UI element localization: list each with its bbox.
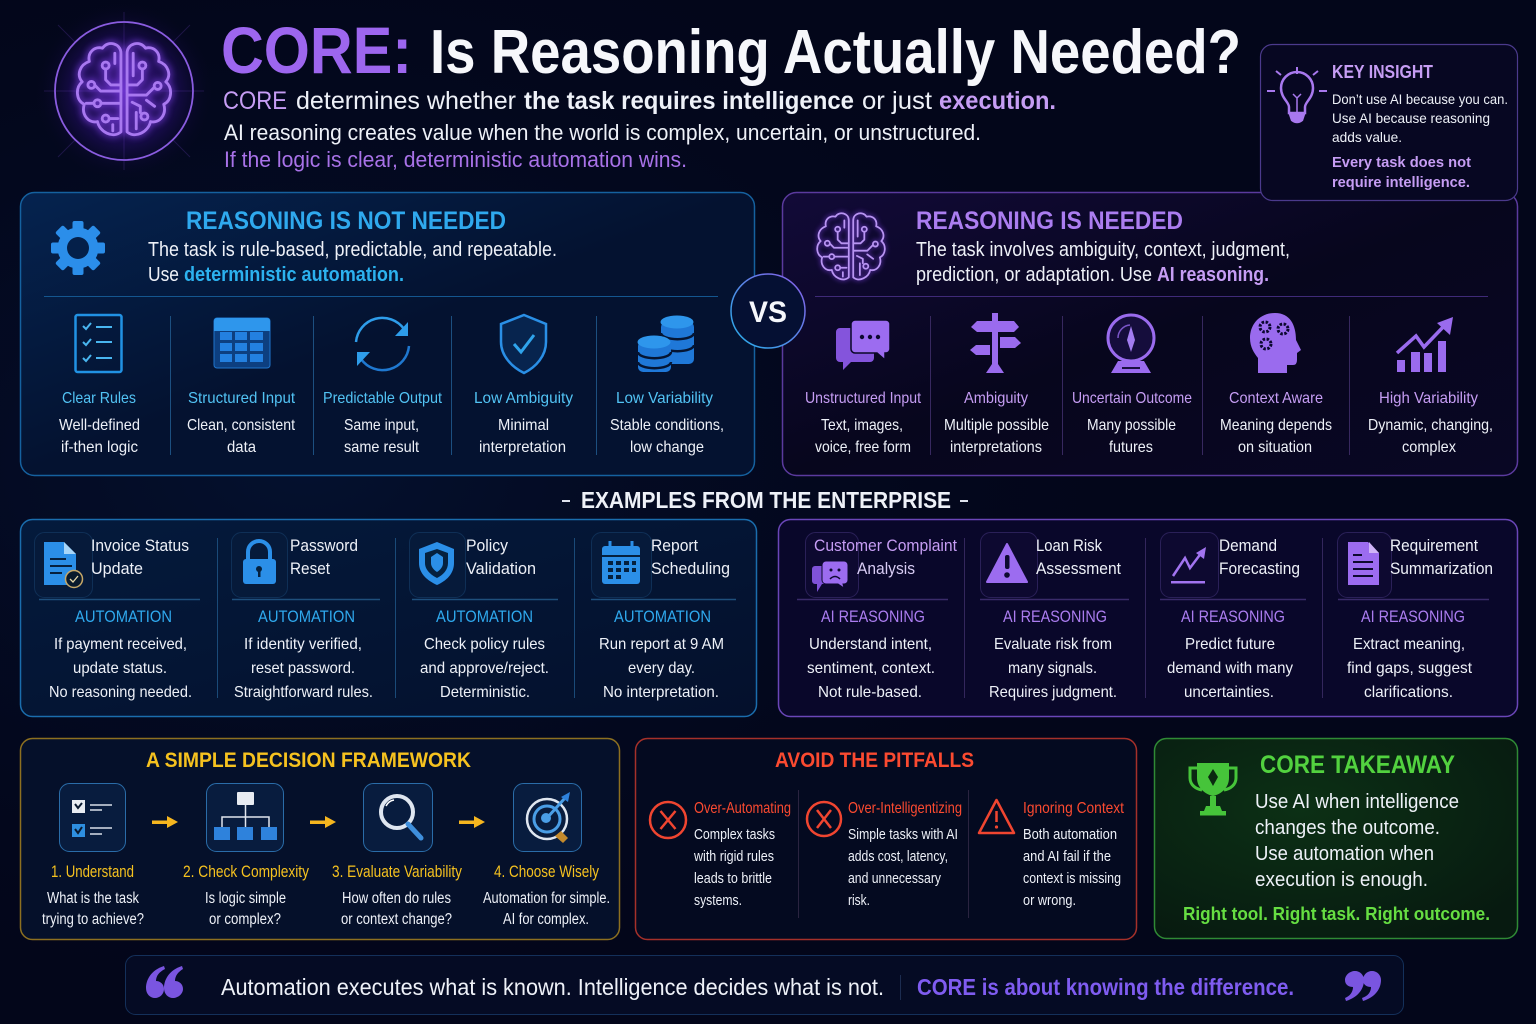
feature: low ambiguity (474, 315, 573, 456)
step 4: choose wisely: AI for complex. (503, 911, 589, 928)
description: The task is rule-based, predictable, and repeatable. (148, 239, 557, 261)
pitfall: over-automating: leads to brittle (694, 870, 772, 887)
feature: high variability (1368, 317, 1493, 456)
example: report scheduling (592, 532, 730, 701)
panel: avoid the pitfalls (636, 738, 1136, 940)
subtitle: or just (862, 87, 932, 115)
feature: unstructured input: Text, images, (821, 417, 903, 434)
subtitle: AI reasoning creates value when the world is complex, uncertain, or unstructured. (224, 120, 981, 145)
pitfall: over-automating: Complex tasks (694, 826, 775, 843)
step 1: understand: trying to achieve? (42, 911, 144, 928)
description (148, 239, 557, 286)
example: policy validation: AUTOMATION (436, 607, 533, 626)
example: customer complaint analysis: sentiment, context. (807, 660, 935, 677)
pitfall: over-automating: systems. (694, 892, 742, 909)
icon: brain (817, 213, 885, 279)
example: policy validation: and approve/reject. (420, 660, 549, 677)
example: customer complaint analysis: Customer Complaint (814, 536, 957, 555)
step 3: evaluate variability (332, 784, 462, 928)
example: invoice status update: AUTOMATION (75, 607, 172, 626)
title (221, 13, 1241, 87)
quote text: Automation executes what is known. Intelligence decides what is not. (221, 974, 884, 1000)
feature: structured input: Structured Input (188, 390, 296, 407)
body text: Don’t use AI because you can. (1332, 91, 1508, 107)
feature: unstructured input: Unstructured Input (805, 390, 921, 407)
pitfall: over-automating: with rigid rules (693, 848, 774, 865)
panel: reasoning is needed (782, 192, 1518, 476)
feature: context aware: on situation (1238, 439, 1312, 456)
feature: low ambiguity: Minimal (498, 417, 549, 434)
step 4: choose wisely: Automation for simple. (483, 890, 610, 907)
pitfall: ignoring context: context is missing (1023, 870, 1121, 887)
example: requirement summarization: clarifications. (1364, 684, 1453, 701)
heading: CORE TAKEAWAY (1260, 751, 1455, 779)
example: requirement summarization (1338, 532, 1493, 701)
example: invoice status update: Invoice Status (91, 536, 189, 555)
step 2: check complexity (183, 784, 309, 928)
feature: low variability (610, 316, 724, 456)
feature: structured input: Clean, consistent (187, 417, 295, 434)
example: password reset: AUTOMATION (258, 607, 355, 626)
description: deterministic automation. (184, 264, 404, 286)
example: invoice status update (34, 532, 192, 701)
example: requirement summarization: find gaps, suggest (1347, 660, 1473, 677)
example: password reset: reset password. (251, 660, 355, 677)
heading: A SIMPLE DECISION FRAMEWORK (146, 749, 471, 772)
feature: low variability: low change (630, 439, 704, 456)
example: requirement summarization: Requirement (1390, 536, 1478, 555)
feature: ambiguity: Ambiguity (964, 390, 1028, 407)
example: report scheduling: Run report at 9 AM (599, 636, 724, 653)
feature: ambiguity (944, 313, 1049, 456)
step 2: check complexity: 2. Check Complexity (183, 862, 309, 881)
example: demand forecasting: AI REASONING (1181, 607, 1285, 626)
example: demand forecasting: demand with many (1167, 660, 1293, 677)
feature: structured input (187, 318, 296, 456)
example: customer complaint analysis (806, 532, 957, 701)
example: demand forecasting: uncertainties. (1184, 684, 1274, 701)
feature: context aware: Context Aware (1229, 390, 1323, 407)
example: loan risk assessment: AI REASONING (1003, 607, 1107, 626)
feature: high variability: complex (1402, 439, 1456, 456)
description: Use (148, 264, 179, 286)
description: The task involves ambiguity, context, judgment, (916, 239, 1290, 261)
heading: REASONING IS NEEDED (916, 207, 1183, 235)
example: customer complaint analysis: Analysis (857, 559, 915, 578)
example: policy validation: Validation (466, 559, 536, 578)
body text: Use automation when (1255, 843, 1434, 865)
example: policy validation (410, 532, 549, 701)
step 1: understand (42, 784, 144, 928)
example: customer complaint analysis: Not rule-based. (818, 684, 922, 701)
example: demand forecasting: Predict future (1185, 636, 1275, 653)
feature: context aware: Meaning depends (1220, 417, 1332, 434)
example: invoice status update: No reasoning needed. (49, 684, 192, 701)
feature: clear rules: if-then logic (61, 439, 138, 456)
example: demand forecasting (1160, 532, 1300, 701)
heading: AVOID THE PITFALLS (775, 749, 974, 772)
feature: uncertain outcome (1072, 315, 1192, 456)
icon: closing quote (1345, 971, 1381, 1001)
example: policy validation: Check policy rules (424, 636, 545, 653)
pitfall: ignoring context: Both automation (1023, 826, 1117, 843)
feature: predictable output: Predictable Output (323, 390, 442, 407)
pitfall: over-intelligentizing: adds cost, latency, (848, 848, 948, 865)
subtitle (223, 87, 1056, 172)
feature: ambiguity: Multiple possible (944, 417, 1049, 434)
step 2: check complexity: Is logic simple (205, 890, 286, 907)
vs badge: VS (749, 296, 787, 329)
feature: high variability: Dynamic, changing, (1368, 417, 1493, 434)
feature: predictable output (323, 318, 442, 456)
example: report scheduling: Report (651, 536, 698, 555)
step 2: check complexity: or complex? (209, 911, 281, 928)
example: report scheduling: Scheduling (651, 559, 730, 578)
icon: hero brain in circle (36, 3, 212, 179)
description: prediction, or adaptation. Use (916, 264, 1152, 286)
pitfall: over-intelligentizing: and unnecessary (848, 870, 941, 887)
feature: uncertain outcome: futures (1109, 439, 1153, 456)
panel: reasoning is not needed (20, 192, 754, 476)
example: invoice status update: Update (91, 559, 143, 578)
feature: uncertain outcome: Uncertain Outcome (1072, 390, 1192, 407)
subtitle: execution. (939, 87, 1056, 115)
feature: low variability: Low Variability (616, 390, 713, 407)
example: loan risk assessment (980, 532, 1121, 701)
example: invoice status update: If payment received, (54, 636, 187, 653)
step 4: choose wisely: 4. Choose Wisely (494, 862, 599, 881)
feature: uncertain outcome: Many possible (1087, 417, 1176, 434)
example: requirement summarization: Summarization (1390, 559, 1493, 578)
feature: unstructured input: voice, free form (815, 439, 911, 456)
example: loan risk assessment: many signals. (1008, 660, 1097, 677)
pitfall: over-intelligentizing: Simple tasks with AI (848, 826, 958, 843)
example: loan risk assessment: Requires judgment. (989, 684, 1117, 701)
arrow (152, 816, 178, 828)
example: loan risk assessment: Evaluate risk from (994, 636, 1112, 653)
feature: clear rules: Well-defined (59, 417, 140, 434)
emphasis text (1332, 154, 1471, 191)
step 3: evaluate variability: or context change? (341, 911, 452, 928)
icon: opening quote (146, 966, 183, 998)
feature: structured input: data (227, 439, 256, 456)
step 3: evaluate variability: How often do rules (342, 890, 451, 907)
feature: low ambiguity: interpretation (479, 439, 566, 456)
icon: trophy (1190, 763, 1236, 816)
description (916, 239, 1290, 286)
pitfall: ignoring context: or wrong. (1023, 892, 1076, 909)
example: requirement summarization: Extract meaning, (1353, 636, 1465, 653)
tagline: Right tool. Right task. Right outcome. (1183, 904, 1490, 924)
feature: low variability: Stable conditions, (610, 417, 724, 434)
feature: predictable output: Same input, (344, 417, 419, 434)
icon: gear (51, 221, 105, 275)
example: requirement summarization: AI REASONING (1361, 607, 1465, 626)
example: demand forecasting: Forecasting (1219, 559, 1300, 578)
step 1: understand: What is the task (47, 890, 139, 907)
emphasis text: Every task does not (1332, 154, 1471, 171)
emphasis text: require intelligence. (1332, 174, 1470, 191)
example: customer complaint analysis: AI REASONING (821, 607, 925, 626)
feature: ambiguity: interpretations (950, 439, 1042, 456)
quote bar (126, 956, 1404, 1014)
example: password reset: If identity verified, (244, 636, 362, 653)
panel: decision framework (20, 738, 620, 940)
subtitle: If the logic is clear, deterministic automation wins. (224, 147, 687, 172)
example: customer complaint analysis: Understand intent, (809, 636, 932, 653)
body text (1332, 91, 1508, 145)
quote emphasis: CORE is about knowing the difference. (917, 974, 1294, 1000)
arrow (310, 816, 336, 828)
body text: execution is enough. (1255, 869, 1428, 891)
panel: core takeaway (1154, 738, 1518, 938)
body text: adds value. (1332, 129, 1402, 145)
example: password reset (232, 532, 373, 701)
subtitle: determines whether (296, 87, 516, 115)
description: AI reasoning. (1157, 264, 1269, 286)
section heading: examples from the enterprise: EXAMPLES FROM THE ENTERPRISE (581, 487, 951, 513)
example: report scheduling: every day. (628, 660, 695, 677)
panel: key insight (1260, 44, 1518, 200)
heading: KEY INSIGHT (1332, 62, 1433, 82)
example: password reset: Reset (290, 559, 330, 578)
example: invoice status update: update status. (73, 660, 167, 677)
body text: changes the outcome. (1255, 817, 1440, 839)
feature: clear rules: Clear Rules (62, 390, 136, 407)
example: report scheduling: AUTOMATION (614, 607, 711, 626)
body text: Use AI because reasoning (1332, 110, 1490, 126)
feature: context aware (1220, 313, 1332, 456)
arrow (459, 816, 485, 828)
body text (1255, 791, 1459, 891)
feature: low ambiguity: Low Ambiguity (474, 390, 573, 407)
vs badge (731, 274, 805, 348)
pitfall: over-intelligentizing: Over-Intelligentizing (848, 800, 962, 817)
pitfall: over-automating: Over-Automating (694, 800, 791, 817)
heading: REASONING IS NOT NEEDED (186, 207, 506, 235)
step 4: choose wisely (483, 784, 610, 928)
pitfall: over-intelligentizing (807, 800, 962, 909)
example: report scheduling: No interpretation. (603, 684, 719, 701)
feature: high variability: High Variability (1379, 390, 1478, 407)
pitfall: ignoring context: Ignoring Context (1023, 800, 1124, 817)
panel: automation examples (20, 520, 756, 716)
panel: ai reasoning examples (778, 520, 1518, 716)
example: loan risk assessment: Assessment (1036, 559, 1121, 578)
pitfall: over-intelligentizing: risk. (848, 892, 870, 909)
example: password reset: Password (290, 536, 358, 555)
pitfall: ignoring context: and AI fail if the (1023, 848, 1111, 865)
example: password reset: Straightforward rules. (234, 684, 373, 701)
subtitle: the task requires intelligence (524, 87, 854, 115)
step 1: understand: 1. Understand (51, 862, 134, 881)
subtitle: CORE (223, 87, 287, 115)
pitfall: over-automating (650, 800, 791, 909)
feature: unstructured input (805, 320, 921, 456)
icon: light bulb (1267, 67, 1327, 122)
example: policy validation: Policy (466, 536, 508, 555)
feature: predictable output: same result (344, 439, 419, 456)
body text: Use AI when intelligence (1255, 791, 1459, 813)
title: CORE: (221, 13, 412, 87)
title: Is Reasoning Actually Needed? (430, 18, 1241, 87)
example: demand forecasting: Demand (1219, 536, 1277, 555)
example: policy validation: Deterministic. (440, 684, 530, 701)
example: loan risk assessment: Loan Risk (1036, 536, 1102, 555)
pitfall: ignoring context (979, 800, 1124, 909)
step 3: evaluate variability: 3. Evaluate Variability (332, 862, 462, 881)
feature: clear rules (59, 315, 140, 456)
